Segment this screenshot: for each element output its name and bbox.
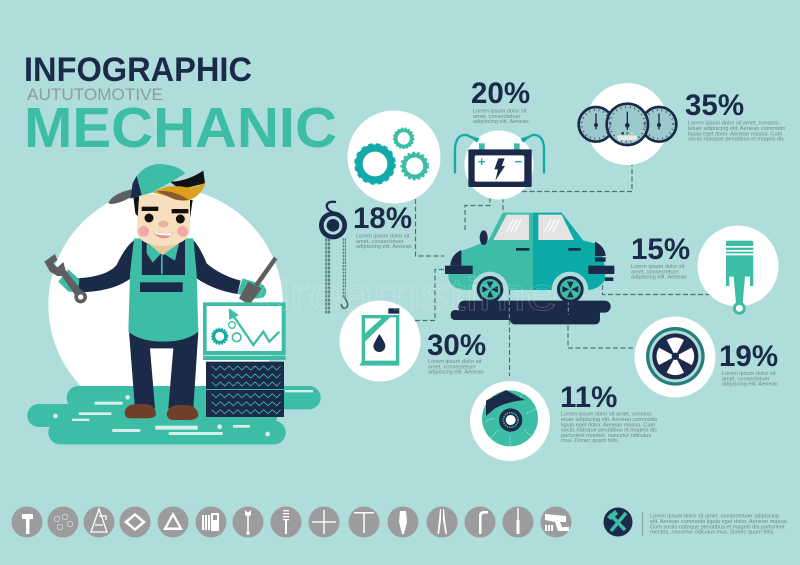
shoes bbox=[125, 404, 156, 418]
shock absorber bbox=[285, 520, 287, 534]
cheeks bbox=[138, 226, 149, 237]
right glove bbox=[237, 278, 266, 299]
stat: 30%: amet, consectetuer bbox=[428, 364, 476, 370]
stat: 15% bbox=[631, 233, 690, 281]
stat: 30%: 30% bbox=[427, 329, 486, 362]
spark plug bbox=[399, 511, 407, 534]
icon: crossed tools badge bbox=[604, 508, 632, 536]
mouth bbox=[153, 232, 173, 238]
stat: 35% bbox=[685, 89, 785, 143]
overalls bbox=[128, 238, 198, 342]
stat: 35%: 35% bbox=[685, 89, 744, 122]
stat: 19%: Lorem ipsum dolor sit bbox=[722, 371, 776, 377]
white backdrop circle bbox=[48, 188, 283, 422]
monitor bbox=[203, 302, 286, 355]
icon: gauges circle bbox=[579, 83, 676, 165]
stat: 11%: 11% bbox=[560, 381, 617, 414]
spanner bbox=[247, 516, 249, 532]
icon: oil can circle bbox=[340, 300, 420, 382]
left glove bbox=[58, 269, 79, 292]
stat: 19%: 19% bbox=[719, 340, 778, 373]
icon: gears circle bbox=[348, 110, 440, 204]
stat: 19% bbox=[719, 340, 778, 388]
stat: 11%: ligula eget dolor. Aenean massa. Cum bbox=[561, 422, 656, 428]
pliers bbox=[438, 509, 447, 534]
collar bbox=[147, 242, 179, 263]
car bbox=[445, 213, 614, 324]
right arm bbox=[193, 239, 241, 294]
stat: 15%: amet, consectetuer bbox=[631, 269, 679, 275]
stat: 11%: mus. Donec quam felis. bbox=[561, 438, 620, 444]
eyebrows bbox=[142, 207, 158, 211]
stat: 11%: etuer adipiscing elit. Aenean commodo bbox=[561, 417, 657, 423]
neck bbox=[147, 240, 178, 255]
footer note bbox=[642, 512, 788, 536]
stat: 20%: 20% bbox=[471, 77, 530, 110]
cross wrench bbox=[323, 510, 325, 534]
stat: 19%: adipiscing elit. Aenean bbox=[722, 382, 778, 388]
crates bbox=[206, 362, 284, 389]
footer note: elit. Aenean commodo ligula eget dolor. Aenean massa. bbox=[650, 519, 788, 525]
cap brim bbox=[108, 189, 133, 204]
stat: 18%: amet, consectetuer bbox=[356, 239, 404, 245]
cap bbox=[130, 164, 185, 199]
floor bbox=[27, 386, 321, 444]
stat: 11%: parturient montes, nascetur ridiculus bbox=[561, 433, 651, 439]
illustration: mechanic scene bbox=[27, 164, 321, 444]
left arm bbox=[77, 239, 135, 292]
icon: chain hoist bbox=[321, 202, 348, 314]
drill bbox=[545, 514, 569, 531]
tool icon row bbox=[12, 506, 572, 538]
stat: 30%: adipiscing elit. Aenean bbox=[428, 370, 484, 376]
icon: brake disc circle bbox=[470, 381, 550, 461]
watermark: dreamstime bbox=[258, 268, 558, 320]
stat: 20%: Lorem ipsum dolor sit bbox=[473, 108, 527, 114]
torso bbox=[142, 239, 185, 275]
connector lines bbox=[415, 163, 717, 376]
pocket bbox=[140, 282, 183, 292]
stat: 35%: ligula eget dolor. Aenean massa. Cum bbox=[688, 131, 783, 137]
l-wrench bbox=[479, 511, 488, 534]
footer note: Cum sociis natoque penatibus et magnis dis parturient bbox=[650, 524, 785, 530]
nuts bbox=[54, 516, 60, 522]
face bbox=[137, 193, 190, 246]
icon: piston circle bbox=[698, 226, 778, 313]
icon: battery circle bbox=[455, 130, 544, 200]
stat: 18%: adipiscing elit. Aenean bbox=[356, 244, 412, 250]
stat: 18% bbox=[353, 202, 412, 250]
stat: 30%: Lorem ipsum dolor sit bbox=[428, 359, 482, 365]
stat: 15%: 15% bbox=[631, 233, 690, 266]
stat: 11%: sociis natoque penatibus et magnis dis bbox=[561, 428, 657, 434]
stat: 15%: adipiscing elit. Aenean bbox=[631, 275, 687, 281]
stat: 18%: 18% bbox=[353, 202, 412, 235]
fuel pump and gauge bbox=[202, 513, 219, 531]
stat: 20%: adipiscing elit. Aenean bbox=[473, 119, 529, 125]
stat: 18%: Lorem ipsum dolor sit bbox=[356, 234, 410, 240]
legs bbox=[129, 332, 198, 408]
footer note: montes, nascetur ridiculus mus. Donec quam felis. bbox=[650, 530, 775, 536]
stat: 15%: Lorem ipsum dolor sit bbox=[631, 264, 685, 270]
footer note: Lorem ipsum dolor sit amet, consectetuer adipiscing bbox=[650, 514, 779, 520]
stat: 11%: Lorem ipsum dolor sit amet, consect- bbox=[561, 412, 653, 418]
stat: 35%: Lorem ipsum dolor sit amet, consect- bbox=[688, 120, 780, 126]
title: INFOGRAPHIC bbox=[24, 51, 252, 89]
car underlay bbox=[451, 301, 611, 324]
t-handle bbox=[354, 512, 374, 514]
scissor jack bbox=[124, 513, 146, 531]
title bbox=[24, 51, 337, 160]
title: AUTUTOMOTIVE bbox=[27, 85, 163, 104]
stat: 35%: sociis natoque penatibus et magnis dis bbox=[688, 137, 784, 143]
floor jack bbox=[91, 509, 107, 532]
stat: 19%: amet, consectetuer bbox=[722, 376, 770, 382]
nose bbox=[158, 221, 169, 227]
stat: 35%: letuer adipiscing elit. Aenean commodo bbox=[688, 126, 785, 132]
warning triangle bbox=[163, 512, 183, 530]
title: MECHANIC bbox=[24, 96, 337, 160]
screwdriver bbox=[239, 257, 277, 305]
hair back bbox=[133, 195, 193, 218]
hair top bbox=[170, 171, 205, 189]
stat: 20% bbox=[471, 77, 530, 125]
eyes bbox=[144, 213, 153, 222]
screwdriver bbox=[517, 508, 519, 520]
stat: 20%: amet, consectetuer bbox=[473, 114, 521, 120]
wrench bbox=[44, 254, 87, 303]
icon: wheel circle bbox=[634, 316, 716, 398]
hammer bbox=[22, 514, 33, 534]
stat: 11% bbox=[560, 381, 657, 444]
